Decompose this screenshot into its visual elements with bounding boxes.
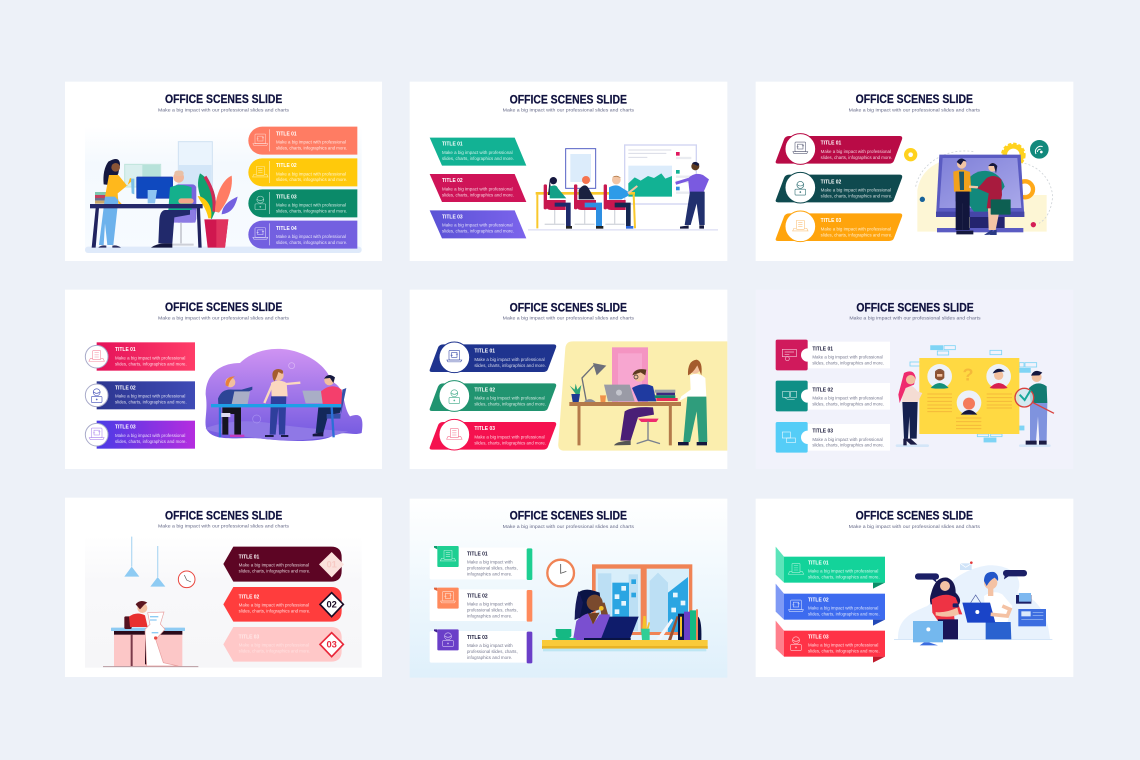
slide 8 subtitle: Make a big impact with our professional slides and charts [503,524,635,530]
slide 1 title: OFFICE SCENES SLIDE [165,93,283,106]
slide 5 bar 03: Make a big impact with professional [474,434,545,440]
slide 2 bar 01: TITLE 01 [442,142,463,148]
slide 1 bar 01 [248,127,357,155]
slide 6 row 03 [776,422,890,453]
slide 8 card 01: professional slides, charts, [467,566,518,572]
slide 4 bar 01: slides, charts, infographics and more. [115,361,187,367]
slide 2: parallelograms and meeting scene [410,82,727,261]
slide 9: folded ribbons and chat scene [756,499,1073,677]
slide 5 bar 01: slides, charts, infographics and more. [474,363,546,369]
slide 2 subtitle: Make a big impact with our professional slides and charts [503,108,635,114]
slide 1 subtitle: Make a big impact with our professional slides and charts [158,107,290,113]
slide 7 paper scene illustration [103,537,198,667]
slide 5 title: OFFICE SCENES SLIDE [510,301,627,314]
slide 9 ribbon 03: slides, charts, infographics and more. [808,649,880,655]
slide 4: gradient bars and team table scene [65,290,382,469]
slide 7 bar 03 [223,627,343,662]
slide 4 bar 01 [85,342,195,371]
slide 5 bar 03 [430,419,556,450]
slide 5 bar 02: Make a big impact with professional [474,396,545,402]
slide 9 chat illustration [894,561,1052,645]
slide 3 bar 02 [776,172,902,203]
slide 9 ribbon 01: Make a big impact with professional [808,569,878,575]
slide 5 bar 02: slides, charts, infographics and more. [474,402,546,408]
slide 3 handshake illustration [904,140,1053,235]
slide 2 title: OFFICE SCENES SLIDE [510,93,627,106]
slide 5 bar 01: TITLE 01 [474,349,495,355]
slide 2 bar 01: Make a big impact with professional [442,150,513,156]
slide 4 bar 01: Make a big impact with professional [115,355,185,361]
slide 3 bar 02: Make a big impact with professional [821,188,891,194]
slide 4 bar 03 [85,421,195,449]
slide 3 bar 02: TITLE 02 [821,179,841,185]
slide 8 card 02: professional slides, charts, [467,607,518,613]
slide 8 card 01 [430,546,532,580]
slide 9 ribbon 01: slides, charts, infographics and more. [808,575,880,581]
slide 7 bar 01: Make a big impact with professional [239,563,309,569]
slide 4 team illustration [205,349,362,441]
slide 4 bar 02: TITLE 02 [115,385,136,391]
slide 4 bar 02 [85,381,195,409]
slide 9 ribbon 03: TITLE 03 [808,635,829,641]
slide 7 bar 03: TITLE 03 [239,634,259,640]
slide 5 bar 03: slides, charts, infographics and more. [474,440,546,446]
slide 6 row 01 [776,340,890,370]
slide 7 bar 03: 03 [326,640,337,650]
slide 7 bar 01 [223,547,344,582]
slide 7 bar 02: slides, charts, infographics and more. [239,609,310,615]
slide 3 bar 01: TITLE 01 [821,141,841,147]
slide 3 bar 03: slides, charts, infographics and more. [821,232,892,238]
slide 2 bar 03 [430,210,526,238]
slide 1 bar 04: slides, charts, infographics and more. [276,240,347,246]
slide 2 bar 02: Make a big impact with professional [442,186,513,192]
slide 6 row 01: Make a big impact with professional [812,354,883,360]
slide 3 title: OFFICE SCENES SLIDE [856,93,973,106]
slide 9 title: OFFICE SCENES SLIDE [856,510,973,523]
slide 8 card 03: professional slides, charts, [467,649,518,655]
slide 5 bar 02 [430,381,556,411]
slide 8 card 01: TITLE 01 [467,552,488,558]
slide 2 bar 02 [430,174,526,202]
slide 9 ribbon 02: Make a big impact with professional [808,606,878,612]
slide 8 card 03: infographics and more. [467,655,512,661]
slide 8 card 03 [430,629,532,663]
slide 5 bar 03: TITLE 03 [474,426,495,432]
slide 9 ribbon 01 [776,547,885,589]
slide 8 window desk illustration [542,560,708,651]
slide 1 bar 03: Make a big impact with professional [276,203,346,209]
slide 6 title: OFFICE SCENES SLIDE [856,301,974,314]
slide 1 bar 03: slides, charts, infographics and more. [276,208,347,214]
slide 2 bar 03: Make a big impact with professional [442,223,513,229]
slide 9 subtitle: Make a big impact with our professional slides and charts [849,524,981,530]
slide 7 bar 02: 02 [326,600,337,610]
slide 7 bar 01: slides, charts, infographics and more. [239,569,310,575]
slide 2 bar 03: slides, charts, infographics and more. [442,229,514,235]
slide 3 bar 03 [776,211,902,242]
slide 7 bar 01: TITLE 01 [239,554,259,560]
slide 7 bar 03: slides, charts, infographics and more. [239,649,310,655]
slide 1 bar 04: TITLE 04 [276,226,297,232]
slide 9 ribbon 03: Make a big impact with professional [808,643,878,649]
slide 7 bar 02 [223,587,343,622]
slide 1 bar 01: TITLE 01 [276,131,297,137]
slide 7 bar 02: Make a big impact with professional [239,603,309,609]
slide 6 row 01: TITLE 01 [812,346,833,352]
slide 6 row 02: slides, charts, infographics and more. [812,402,884,408]
slide 7: hex bars with diamond numbers and paper scene [65,498,382,677]
slide 8 card 01: Make a big impact with [467,560,513,566]
slide 4 bar 03: TITLE 03 [115,425,136,431]
slide 2 bar 02: TITLE 02 [442,178,463,184]
slide 7 bar 03: Make a big impact with professional [239,643,309,649]
slide 8 card 03: TITLE 03 [467,635,488,641]
slide 1 bar 01: slides, charts, infographics and more. [276,145,347,151]
slide 3 bar 01 [776,134,902,164]
slide 8 card 02: Make a big impact with [467,601,513,607]
slide 6 row 03: Make a big impact with professional [812,437,883,443]
slide 5 desk illustration [558,341,727,451]
slide 8 card 01: infographics and more. [467,572,512,578]
slide 6 candidates illustration [896,346,1054,447]
slide 3 bar 01: slides, charts, infographics and more. [821,155,892,161]
slide 1 bar 03: TITLE 03 [276,194,297,200]
slide 9 ribbon 03 [776,621,885,663]
slide 6 row 01: slides, charts, infographics and more. [812,360,884,366]
slide 4 bar 03: Make a big impact with professional [115,433,185,439]
slide 9 ribbon 02 [776,584,885,626]
slide 1 office illustration [90,142,238,248]
slide 5 bar 02: TITLE 02 [474,387,495,393]
slide 1 bar 02: Make a big impact with professional [276,171,346,177]
slide 1 scene backdrop [85,127,362,253]
slide 1: four rounded bars and desk scene [65,82,382,261]
slide 7 subtitle: Make a big impact with our professional slides and charts [158,524,290,530]
slide 1 bar 01: Make a big impact with professional [276,140,346,146]
slide 3: slanted bars and handshake scene [756,82,1073,261]
slide 8 title: OFFICE SCENES SLIDE [510,510,627,523]
slide 3 bar 01: Make a big impact with professional [821,149,891,155]
slide 6 subtitle: Make a big impact with our professional slides and charts [849,316,981,322]
slide 6 row 02: Make a big impact with professional [812,396,883,402]
slide 9 ribbon 02: slides, charts, infographics and more. [808,612,880,618]
slide 3 subtitle: Make a big impact with our professional slides and charts [849,107,981,113]
slide 8: white cards and window desk scene [410,499,727,678]
slide 2 meeting illustration [528,145,718,231]
slide 1 bar 04: Make a big impact with professional [276,234,346,240]
slide 2 bar 02: slides, charts, infographics and more. [442,192,514,198]
slide 1 bar 02 [248,158,357,186]
slide 6: notched squares and candidates board scene [756,290,1073,469]
slide 1 bar 02: slides, charts, infographics and more. [276,177,347,183]
slide 4 bar 01: TITLE 01 [115,347,136,353]
slide 7 bar 01: 01 [326,560,337,570]
slide 4 title: OFFICE SCENES SLIDE [165,301,283,314]
slide 7 title: OFFICE SCENES SLIDE [165,509,283,522]
slide 9 ribbon 01: TITLE 01 [808,561,829,567]
slide 6 row 03: TITLE 03 [812,428,833,434]
slide 7 bar 02: TITLE 02 [239,594,259,600]
slide 8 card 02 [430,588,532,622]
slide 5 subtitle: Make a big impact with our professional slides and charts [503,316,635,322]
slide 4 bar 02: slides, charts, infographics and more. [115,400,187,406]
slide 8 card 03: Make a big impact with [467,643,513,649]
slide 9 ribbon 02: TITLE 02 [808,598,829,604]
slide 4 subtitle: Make a big impact with our professional slides and charts [158,315,290,321]
slide 6 candidates illustration: ? [962,365,973,385]
slide 3 bar 02: slides, charts, infographics and more. [821,194,892,200]
slide 6 row 02 [776,381,890,411]
slide 8 card 02: infographics and more. [467,613,512,619]
slide 5 bar 01 [430,342,556,373]
slide 4 bar 02: Make a big impact with professional [115,394,185,400]
slide 8 card 02: TITLE 02 [467,593,488,599]
slide 3 bar 03: Make a big impact with professional [821,226,891,232]
slide 2 bar 01 [430,138,526,166]
slide 2 bar 03: TITLE 03 [442,214,463,220]
slide 6 row 03: slides, charts, infographics and more. [812,443,884,449]
slide 5 bar 01: Make a big impact with professional [474,357,545,363]
slide 1 bar 03 [248,189,357,217]
slide 5: slanted bars and yellow desk scene [410,290,727,469]
slide 7 scene backdrop [85,536,362,668]
slide 1 bar 02: TITLE 02 [276,163,297,169]
slide 1 bar 04 [248,221,357,249]
slide 3 bar 03: TITLE 03 [821,218,841,224]
slide 2 bar 01: slides, charts, infographics and more. [442,156,514,162]
slide 4 bar 03: slides, charts, infographics and more. [115,439,187,445]
slide 6 row 02: TITLE 02 [812,387,833,393]
